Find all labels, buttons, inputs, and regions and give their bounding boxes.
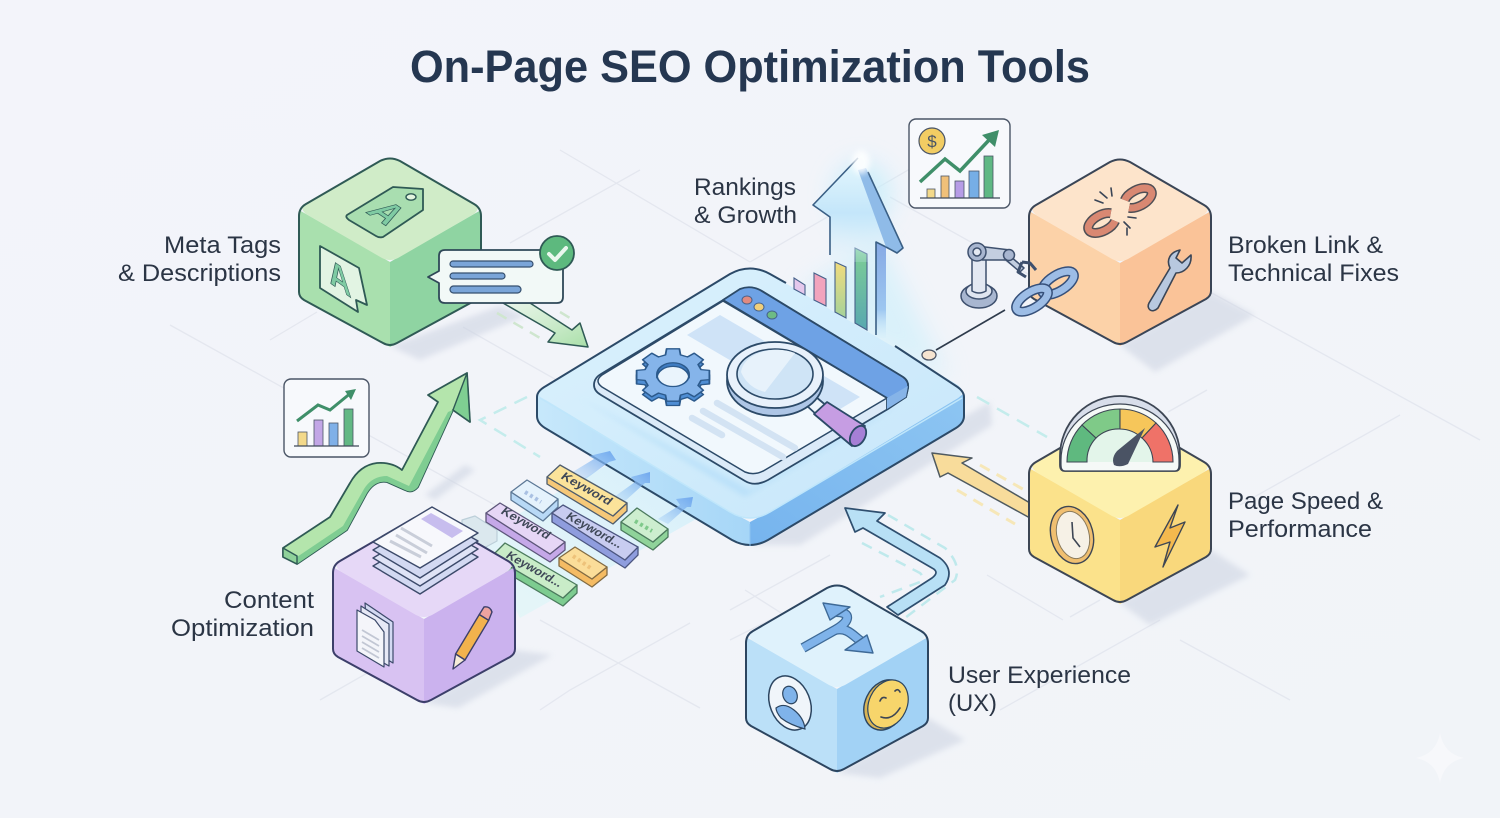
avatar icon: [761, 670, 819, 736]
chip: green keyword: Keyword...: [503, 549, 566, 590]
lightning icon: [1155, 505, 1185, 567]
chip: green keyword: [492, 543, 577, 606]
speech bubble: [428, 236, 574, 303]
page hero block: [687, 315, 860, 417]
cube: user experience: [746, 586, 928, 773]
smiley icon: [856, 673, 916, 737]
magnifier ring: [727, 346, 823, 416]
magnifier handle: [806, 397, 870, 449]
robot arm: [961, 243, 1036, 308]
rising bars: [794, 242, 886, 338]
label: rankings and growth: & Growth: [694, 202, 797, 229]
dashed connector: content: [480, 397, 540, 457]
meta arrow: [497, 303, 588, 347]
title: On-Page SEO Optimization Tools: [410, 41, 1090, 92]
chip: blue dots: [511, 480, 558, 521]
gauge needle: [1113, 428, 1145, 466]
branch arrows icon: [803, 603, 873, 653]
platform body: [537, 268, 964, 546]
check badge: [540, 236, 574, 270]
broken chain icon: [1085, 184, 1155, 237]
gauge dome: [1060, 396, 1180, 471]
document icon: [357, 603, 393, 667]
paper stack: [373, 507, 478, 594]
label: meta tags: Meta Tags: [164, 232, 281, 259]
arrow side: [858, 168, 903, 253]
chip: yellow keyword: Keyword: [558, 470, 616, 508]
page text lines: [692, 403, 795, 457]
chip: purple keyword: [486, 503, 565, 562]
cube: meta tags: A: [326, 248, 352, 306]
label: meta tags: & Descriptions: [118, 260, 281, 287]
chip: indigo keyword: [552, 505, 638, 568]
meta dashes: [497, 312, 570, 338]
chain links: [1012, 267, 1078, 316]
chip: green dots: [621, 508, 668, 550]
gear icon: [637, 349, 709, 406]
cube body: [299, 158, 481, 347]
keyword chips: [462, 465, 668, 606]
window header: [723, 287, 908, 409]
label: user experience: User Experience: [948, 662, 1131, 689]
shadow: cubes and platform: [390, 292, 1255, 778]
chip: yellow keyword: [547, 465, 627, 524]
keyword feed band: [480, 447, 730, 618]
window body: [594, 288, 908, 484]
connector pin: [922, 310, 1005, 360]
label: page speed: Page Speed &: [1228, 488, 1383, 515]
path arrow: user experience: [845, 508, 957, 618]
cube: meta tags: A: [358, 195, 416, 230]
platform glow: [800, 240, 950, 380]
arrow front: [813, 153, 886, 262]
growth arrow: content: [283, 373, 470, 564]
chip: orange dots: [559, 547, 607, 587]
cube: meta tags: [299, 158, 481, 347]
cube: page speed: [1029, 416, 1211, 604]
label: page speed: Performance: [1228, 516, 1372, 543]
mini chart card: left: [284, 379, 369, 457]
magnifier lens: [737, 349, 813, 399]
speed gauge: [1060, 396, 1180, 471]
cube: broken link: [1029, 160, 1211, 346]
ux arrow shape: [845, 508, 949, 615]
arrow glow: [832, 161, 892, 229]
label: user experience: (UX): [948, 690, 997, 717]
cube body: [333, 516, 515, 704]
label: broken link: Broken Link &: [1228, 232, 1383, 259]
magnifier icon: [727, 342, 870, 449]
chip: indigo keyword: Keyword...: [563, 510, 626, 551]
tag icon: [346, 187, 423, 237]
cube body: [746, 586, 928, 773]
chip: purple keyword: Keyword: [498, 505, 554, 542]
label: content optimization: Optimization: [171, 615, 314, 642]
chip: ghost: [462, 516, 497, 548]
window buttons: [742, 296, 777, 319]
yellow arrow: [932, 453, 1030, 524]
dashed connector: page speed: [977, 397, 1047, 437]
big growth arrow: [813, 150, 903, 335]
label: content optimization: Content: [224, 587, 314, 614]
yellow dashes: [957, 465, 1028, 524]
central platform: [537, 240, 964, 546]
cube body: [1029, 416, 1211, 604]
cube: content: [333, 507, 515, 704]
label: rankings and growth: Rankings: [694, 174, 796, 201]
mini chart card: top: [909, 119, 1010, 208]
gauge arcs: [1067, 409, 1173, 462]
pencil icon: [453, 607, 492, 669]
clock icon: [1044, 502, 1100, 568]
label: broken link: Technical Fixes: [1228, 260, 1399, 287]
cube body: [1029, 160, 1211, 346]
wrench icon: [1148, 250, 1191, 311]
sparkle watermark: [1416, 733, 1464, 783]
browser window: [594, 287, 908, 484]
keyword arrows: [571, 451, 693, 524]
ux dashes: [862, 515, 957, 618]
yellow arrow shape: [932, 453, 1030, 518]
mini chart card: top: $: [927, 132, 937, 151]
label icon: [320, 246, 367, 312]
meta arrow shape: [503, 303, 588, 347]
